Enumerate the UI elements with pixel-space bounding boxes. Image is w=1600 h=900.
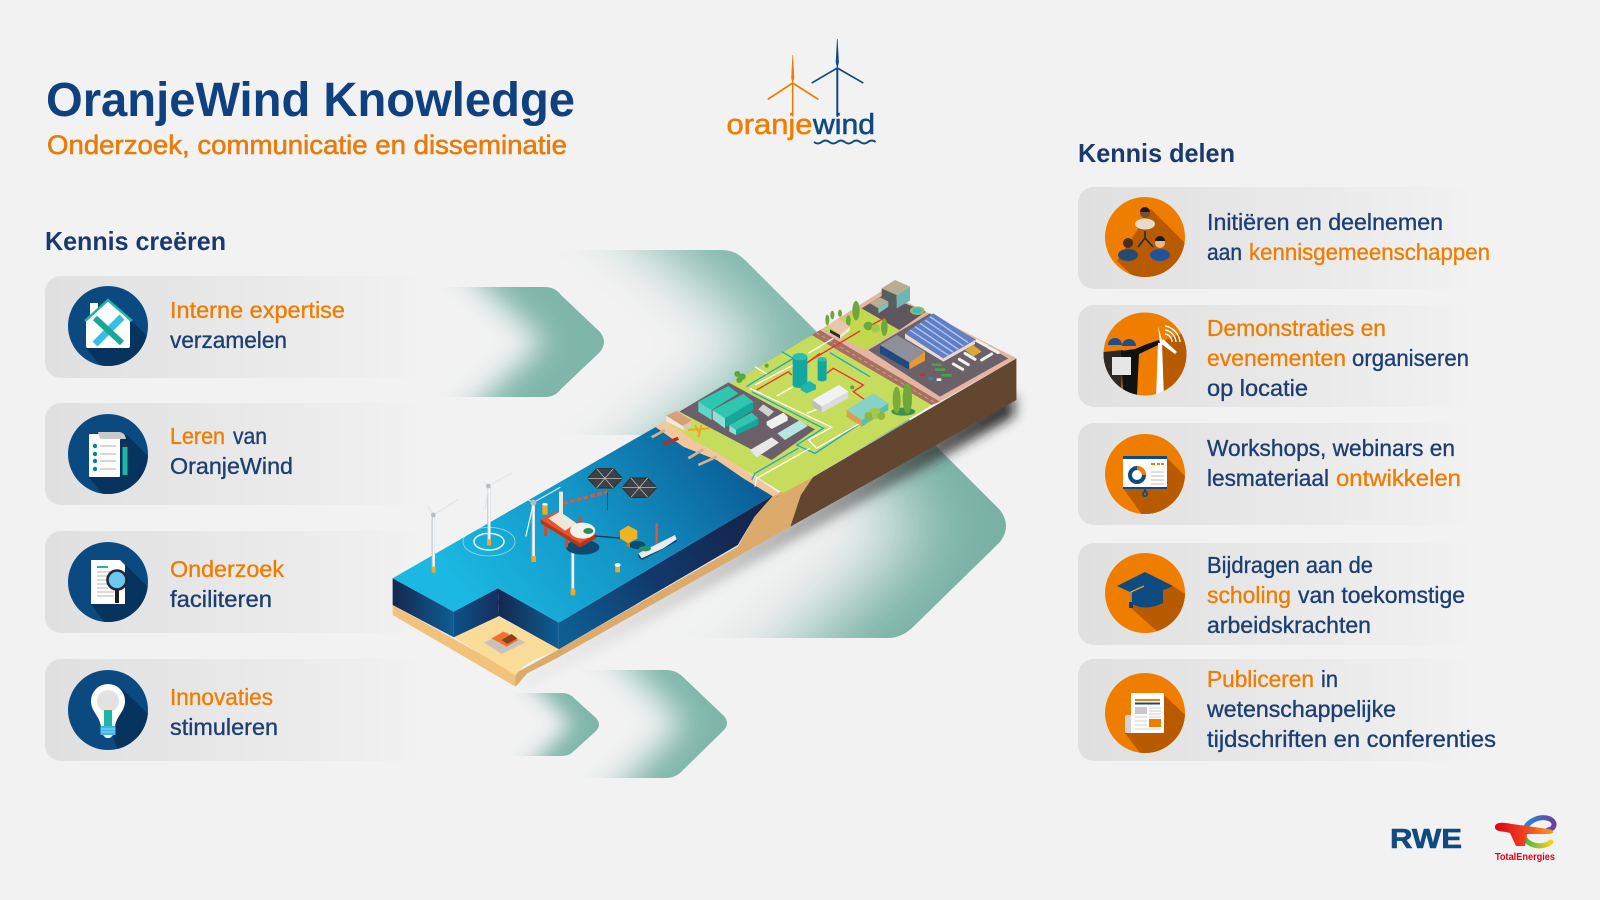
silo large	[793, 353, 807, 388]
sand right face	[516, 477, 813, 687]
pipelines on road	[808, 318, 885, 362]
vessel	[638, 523, 677, 560]
silo annex	[801, 381, 816, 393]
wordmark: TotalEnergies	[1495, 852, 1555, 863]
jack-up platform	[541, 503, 596, 547]
text: in	[1321, 666, 1338, 692]
icon: presentation board	[1105, 434, 1185, 514]
chevron: bottom small	[520, 693, 599, 756]
blue pipes	[747, 352, 870, 480]
wave rings	[463, 527, 515, 556]
panel: Interne expertise	[45, 276, 344, 378]
bush	[734, 364, 854, 389]
water inner face	[498, 588, 559, 649]
water surface	[393, 427, 778, 623]
white building	[812, 385, 848, 413]
text: Demonstraties en	[1207, 315, 1386, 341]
office tower	[882, 280, 910, 308]
pipelines	[747, 352, 870, 487]
dark pad	[862, 295, 926, 330]
text: Bijdragen aan de	[1207, 552, 1373, 578]
text: OranjeWind	[170, 453, 293, 479]
wordmark blue: wind	[812, 109, 875, 141]
panel: kennisgemeenschappen	[1078, 187, 1489, 289]
text: van toekomstige	[1298, 582, 1465, 608]
chevron: top large	[594, 250, 824, 435]
text: scholing	[1207, 582, 1291, 608]
text: Workshops, webinars en	[1207, 435, 1455, 461]
panel: workshops	[1078, 423, 1460, 525]
offshore detail: wind farm, platform and vessels	[428, 469, 677, 654]
text: verzamelen	[170, 327, 287, 353]
silo small	[817, 357, 827, 381]
text: Publiceren	[1207, 666, 1314, 692]
platform shadow	[566, 540, 599, 555]
text: tijdschriften en conferenties	[1207, 726, 1496, 752]
pool	[910, 306, 925, 315]
illustration: isometric offshore and onshore island	[393, 280, 1017, 692]
sand top	[454, 616, 559, 675]
text: organiseren	[1352, 345, 1469, 371]
panel: demonstraties	[1078, 305, 1478, 407]
quay crane	[688, 425, 709, 437]
text: faciliteren	[170, 586, 272, 612]
icon: document and magnifier	[68, 542, 148, 622]
water front face	[559, 495, 774, 649]
blue turbine	[812, 39, 863, 116]
shadow under island	[523, 393, 1013, 692]
industrial pad	[868, 313, 1008, 397]
warehouse	[880, 335, 925, 370]
teal hall 1	[698, 386, 738, 420]
text: Innovaties	[170, 684, 273, 710]
logo: TotalEnergies	[1495, 818, 1555, 863]
icon: graduation cap	[1105, 553, 1185, 633]
island base	[393, 358, 1016, 692]
text: Onderzoek	[170, 556, 284, 582]
text: aan	[1207, 239, 1242, 265]
wordmark orange: oranje	[726, 109, 812, 141]
chevron: lower large	[730, 419, 1006, 638]
icon: light bulb with pencil	[68, 670, 148, 750]
shore strip	[655, 421, 780, 497]
icon: house with tools	[68, 286, 148, 366]
chevron: bottom medium	[597, 670, 727, 778]
parked cars	[920, 363, 952, 381]
turbine foundations	[432, 539, 575, 595]
logo: RWE: RWE	[1390, 823, 1462, 854]
harbour house	[666, 411, 692, 431]
swirl e bottom	[1524, 836, 1551, 846]
text: arbeidskrachten	[1207, 612, 1371, 638]
hexagonal structures	[588, 469, 657, 497]
yellow substation	[620, 526, 645, 549]
swirl T	[1495, 823, 1553, 846]
buoy	[615, 563, 621, 572]
solar hall	[905, 313, 975, 362]
orange turbine	[768, 55, 818, 116]
text: van	[233, 423, 267, 449]
panel: Onderzoek faciliteren	[45, 531, 284, 633]
crane	[561, 492, 608, 515]
boat	[663, 438, 678, 444]
earth side	[790, 358, 1016, 527]
land green	[667, 335, 932, 493]
loading area	[965, 345, 982, 357]
trees front	[864, 383, 915, 420]
panel: Leren van OranjeWind	[45, 403, 292, 505]
text: wetenschappelijke	[1206, 696, 1396, 722]
trucks	[953, 341, 998, 369]
jetties	[652, 430, 717, 465]
road	[812, 330, 940, 405]
swirl e top	[1524, 818, 1554, 832]
back land	[820, 290, 1017, 402]
panel: scholing	[1078, 543, 1478, 645]
icon: newspaper	[1105, 673, 1185, 753]
turbine hubs	[431, 484, 536, 517]
white pipes	[750, 363, 860, 487]
teal hall 3	[729, 413, 758, 435]
factory pad	[679, 382, 815, 460]
low office	[870, 297, 888, 313]
teal hall 2	[713, 394, 753, 428]
red pipes	[757, 353, 870, 403]
text: ontwikkelen	[1336, 465, 1461, 491]
text: op locatie	[1207, 375, 1308, 401]
onshore detail: road and city block	[808, 280, 1017, 427]
red line back	[872, 318, 885, 325]
water notch face	[454, 588, 499, 637]
text: Initiëren en deelnemen	[1207, 209, 1443, 235]
green patch	[823, 308, 900, 350]
icon: engineers and turbine	[1104, 312, 1186, 396]
trees back	[825, 301, 888, 336]
panel: publiceren	[1078, 659, 1496, 761]
icon: people network	[1105, 197, 1185, 277]
subtitle: Onderzoek, communicatie en disseminatie	[47, 130, 567, 160]
farmhouse	[828, 318, 850, 338]
red line	[808, 331, 860, 362]
title: OranjeWind Knowledge	[46, 74, 575, 127]
waves	[814, 140, 876, 144]
chevron: upper small	[455, 287, 604, 397]
greenhouse	[847, 393, 888, 427]
icon: document and pencil	[68, 414, 148, 494]
logo: oranjewind	[726, 39, 876, 144]
sand left face	[393, 605, 516, 687]
turbine towers	[428, 473, 573, 587]
tanks	[750, 404, 808, 457]
text: stimuleren	[170, 714, 278, 740]
text: evenementen	[1207, 345, 1346, 371]
white line	[808, 338, 833, 353]
text: kennisgemeenschappen	[1249, 239, 1490, 265]
heading: Kennis delen: Kennis delen	[1078, 138, 1235, 168]
onshore substation on sand	[484, 632, 525, 654]
export cable	[595, 536, 623, 538]
text: lesmateriaal	[1207, 465, 1329, 491]
text: Interne expertise	[170, 297, 345, 323]
text: Leren	[170, 423, 225, 449]
water left face	[393, 578, 454, 637]
onshore detail: harbour and energy plant	[652, 352, 870, 497]
panel: Innovaties stimuleren	[45, 659, 277, 761]
heading: Kennis creëren: Kennis creëren	[45, 226, 226, 256]
